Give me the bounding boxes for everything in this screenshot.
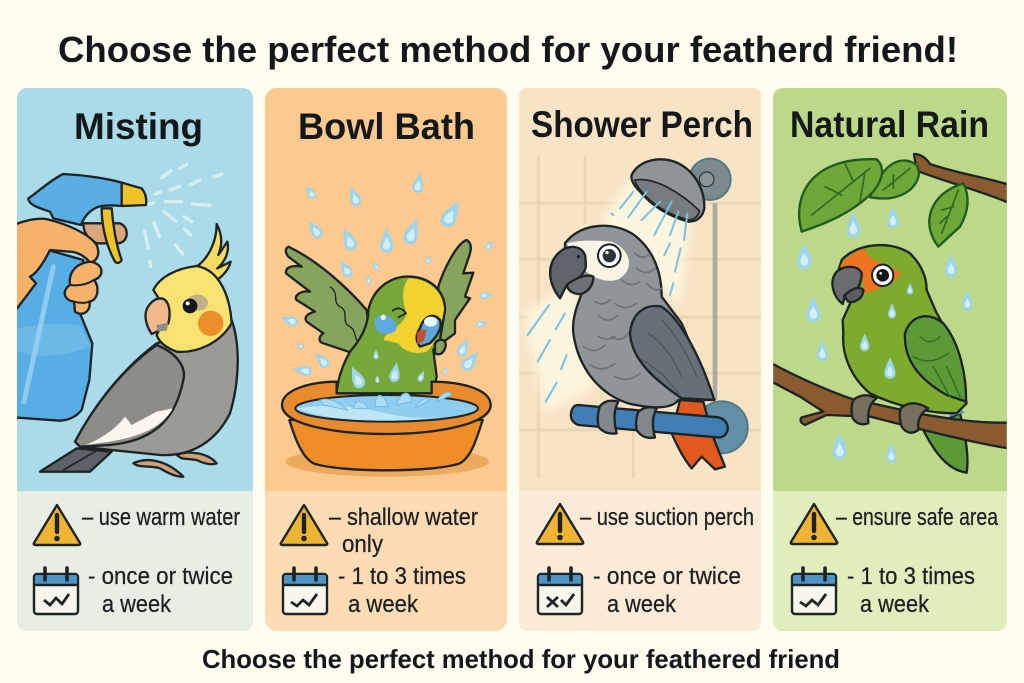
- schedule text: a week: [860, 591, 930, 618]
- heading: natural rain: Natural Rain: [790, 104, 989, 145]
- footer caption: Choose the perfect method for your feathered friend: [202, 644, 840, 674]
- icon: spray bottle: [13, 174, 146, 421]
- title: Choose the perfect method for your featherd friend!: [58, 29, 958, 70]
- icon: hand: [13, 219, 101, 314]
- illustration: parrot in rain: [772, 154, 1010, 473]
- panel: misting: [13, 88, 253, 631]
- icon: calendar: [34, 568, 78, 614]
- icon: bowl: [282, 382, 491, 470]
- schedule text: [593, 563, 741, 618]
- icon: warning: [281, 505, 327, 545]
- heading: bowl bath: Bowl Bath: [298, 106, 475, 147]
- tip: suction perch: – use suction perch: [580, 504, 754, 531]
- icon: green parrot: [832, 245, 967, 473]
- water streams: [528, 192, 687, 402]
- panel: shower perch: [519, 88, 761, 631]
- icon: parakeet: [336, 277, 446, 400]
- icon: mist spray: [144, 164, 222, 267]
- schedule text: a week: [102, 591, 172, 618]
- schedule text: a week: [607, 591, 677, 618]
- schedule text: - once or twice: [593, 563, 741, 590]
- tip: shallow water: only: [342, 531, 383, 558]
- tip: shallow water: – shallow water: [329, 504, 478, 531]
- icon: warning: [537, 504, 583, 544]
- schedule text: - once or twice: [88, 563, 233, 590]
- tip: shallow water: [329, 504, 478, 558]
- schedule text: - 1 to 3 times: [847, 563, 975, 590]
- schedule text: [88, 563, 233, 618]
- icon: warning: [791, 504, 837, 544]
- light beam: [523, 180, 692, 413]
- icon: grey parrot: [550, 226, 714, 407]
- schedule text: [847, 563, 975, 618]
- schedule text: - 1 to 3 times: [338, 563, 466, 590]
- illustration: spray bottle and cockatiel: [13, 164, 238, 477]
- icon: cockatiel: [40, 224, 238, 477]
- icon: perch mount: [706, 400, 749, 454]
- icon: calendar: [792, 568, 836, 614]
- icon: shower head: [631, 159, 731, 400]
- schedule text: a week: [348, 591, 419, 618]
- heading: misting: Misting: [74, 106, 203, 147]
- panel: natural rain: [772, 88, 1010, 631]
- icon: warning: [34, 505, 80, 545]
- tip: warm water: – use warm water: [82, 504, 240, 531]
- icon: lower branch: [772, 363, 1008, 448]
- tile wall: [519, 155, 761, 478]
- icon: perch: [571, 401, 728, 438]
- heading: shower perch: Shower Perch: [531, 104, 753, 145]
- icon: tail feathers: [672, 400, 725, 469]
- bowl shadow: [286, 447, 489, 477]
- icon: upper branch: [914, 154, 1010, 203]
- panel: bowl bath: [265, 88, 507, 631]
- icon: raindrops: [797, 206, 972, 463]
- icon: calendar: [538, 568, 582, 614]
- schedule text: [338, 563, 466, 618]
- icon: calendar: [283, 568, 327, 614]
- icon: water splash: [279, 172, 496, 390]
- icon: wings: [286, 240, 473, 353]
- illustration: grey parrot in shower: [519, 155, 761, 478]
- illustration: parakeet in bowl: [279, 172, 496, 477]
- icon: leaves: [799, 159, 968, 247]
